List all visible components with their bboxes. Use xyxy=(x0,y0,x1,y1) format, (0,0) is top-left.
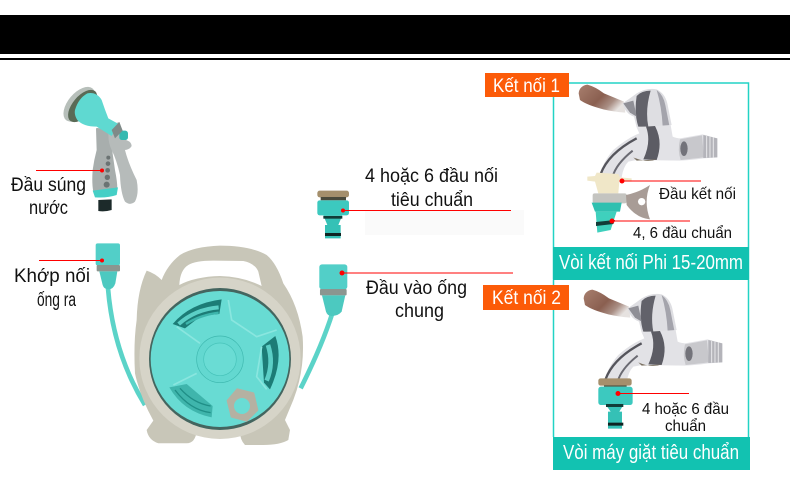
reel housing xyxy=(134,246,303,445)
hose window top xyxy=(173,299,222,328)
icon: hose reel xyxy=(96,243,347,445)
right connector xyxy=(319,264,347,316)
panel: connection 1 xyxy=(553,83,749,280)
badge: connection 2: Kết nối 2 xyxy=(492,288,561,309)
right hose xyxy=(301,313,332,388)
black header band xyxy=(0,15,790,54)
spoke shading xyxy=(173,300,277,389)
caption: standard washing machine faucet: Vòi máy giặt tiêu chuẩn xyxy=(563,442,739,464)
icon: spray gun xyxy=(57,81,138,211)
callout: 4 or 6 standard heads: chuẩn xyxy=(665,417,706,435)
reel disc xyxy=(151,291,289,427)
callout: spray gun xyxy=(11,168,104,219)
hose window right xyxy=(262,336,279,389)
callout: 4, 6 standard: 4, 6 đầu chuẩn xyxy=(633,224,732,242)
left hose xyxy=(108,288,145,405)
callout: outlet joint: Khớp nối xyxy=(14,266,90,287)
callout: spray gun: Đầu súng xyxy=(11,175,86,196)
left connector xyxy=(96,243,120,289)
hose window bottom xyxy=(169,384,213,417)
panel: connection 2 xyxy=(553,280,750,470)
callout: connector head: Đầu kết nối xyxy=(659,186,736,203)
callout: 4, 6 standard xyxy=(610,218,732,242)
callout: 4 or 6 standard connector: tiêu chuẩn xyxy=(391,190,473,211)
handle opening xyxy=(179,261,262,286)
callout: outlet joint: ống ra xyxy=(37,290,76,311)
badge: connection 1: Kết nối 1 xyxy=(493,76,560,97)
callout: 4 or 6 standard heads xyxy=(616,391,729,435)
caption: faucet 15-20mm: Vòi kết nối Phi 15-20mm xyxy=(559,252,743,274)
icon: faucet 2 xyxy=(584,290,722,429)
teal caption band 1 xyxy=(553,247,749,280)
icon: faucet 1 xyxy=(579,85,717,233)
connector xyxy=(598,378,632,386)
callout: common inlet: Đầu vào ống xyxy=(366,278,467,299)
callout: common inlet xyxy=(340,270,513,322)
hub xyxy=(197,336,243,383)
connector: 4 or 6 standard xyxy=(317,191,349,238)
callout: common inlet: chung xyxy=(395,301,444,322)
callout: 4 or 6 standard connector: 4 hoặc 6 đầu nối xyxy=(365,166,498,187)
adapter clamp xyxy=(587,173,632,193)
wing screw xyxy=(626,185,650,219)
callout: 4 or 6 standard heads: 4 hoặc 6 đầu xyxy=(642,401,729,418)
faint patch xyxy=(365,210,524,235)
callout: connector head xyxy=(620,178,736,203)
teal caption band 2 xyxy=(553,437,750,470)
callout: spray gun: nước xyxy=(29,198,68,219)
callout: 4 or 6 standard connector xyxy=(341,166,511,212)
adapter teal xyxy=(592,203,622,212)
callout: outlet joint xyxy=(14,258,104,311)
knob xyxy=(228,389,257,421)
